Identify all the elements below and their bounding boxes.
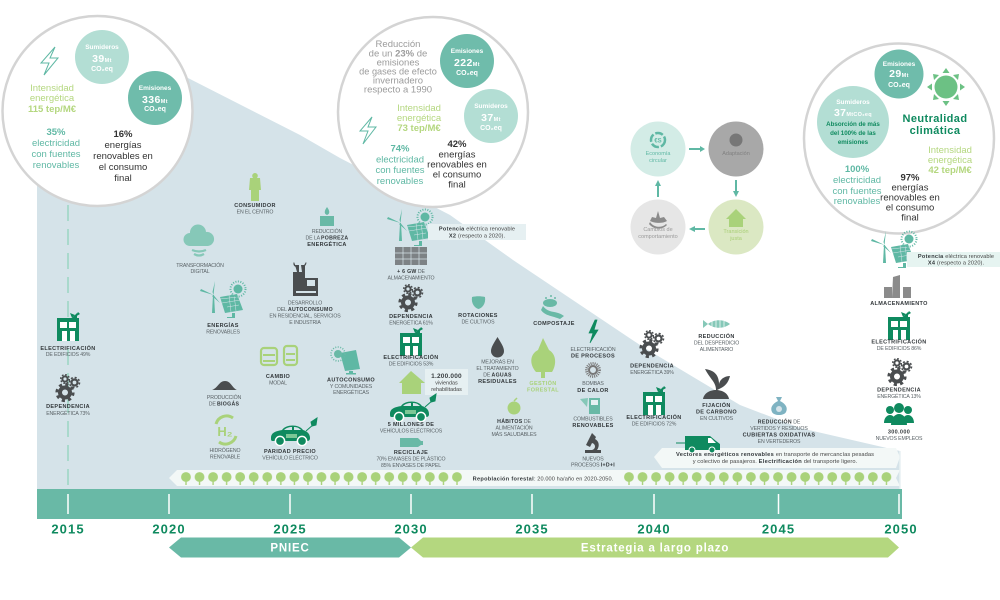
item: potencia x2 [387,209,526,246]
text: renovables: final [114,173,132,184]
bubble: sumideros: del 100% de las [830,130,876,137]
item: almacenamiento +6GW [388,247,435,282]
item: viviendas rehabilitadas: 1.200.000 [431,373,462,380]
text: renovables: final [901,212,919,224]
text: renovables: energías [439,150,476,160]
item: electrificación 53%: DE EDIFICIOS 53% [389,362,434,368]
bubble: sumideros: 37MtCO₂eq [834,107,872,119]
item: combustibles renovables: COMBUSTIBLES [573,416,613,422]
item: 5 millones vehículos [380,394,443,434]
item: nuevos empleos: NUEVOS EMPLEOS [876,436,923,442]
heading: neutralidad climática: Neutralidad [903,113,967,125]
text: intensidad [928,145,973,176]
vectors strip: Vectores energéticos renovables en transporte de mercancías pesadas [676,452,874,458]
year labels: 2020 [152,522,186,536]
circle: economía circular: Economía [646,151,671,157]
text: electricidad: electricidad [376,154,424,166]
item: energías renovables: ENERGÍAS [207,321,239,329]
item: autoconsumo y comunidades: AUTOCONSUMO [327,378,375,384]
item: fijación de carbono [696,369,737,422]
text: electricidad: renovables [377,176,423,187]
text: renovables: energías [105,140,142,151]
item: bombas de calor: DE CALOR [577,388,609,394]
item: autoconsumo: DESARROLLO [288,300,322,306]
bubble: emisiones: CO₂eq [888,82,910,89]
item: dependencia 2015 [46,375,90,417]
item: nuevos procesos [571,433,615,468]
item: reducción vertidos: CUBIERTAS OXIDATIVAS [743,432,815,438]
arrows between circles [655,146,739,232]
item: dependencia 13%: DEPENDENCIA [877,388,921,394]
circle: transición justa: justa [729,236,743,242]
item: mejoras aguas: EL TRATAMIENTO [476,366,519,372]
item: dependencia 13%: ENERGÉTICA 13% [877,393,921,400]
icon: lightning [360,117,376,144]
item: mejoras aguas [476,337,519,385]
bubble: sumideros: CO₂eq [480,125,502,132]
text: intensidad [28,83,77,115]
text: intensidad: energética [928,155,973,166]
circle: cambios de comportamiento: Cambios de [643,227,673,233]
cycle diagram [630,122,764,254]
item: hábitos de alimentación: ALIMENTACIÓN [495,424,533,432]
item: hábitos de alimentación: HÁBITOS DE [497,418,531,425]
text: electricidad: 74% [390,144,410,154]
item: reducción vertidos: REDUCCIÓN DE [758,418,801,426]
text: electricidad: con fuentes [832,186,882,197]
bubble: sumideros [817,86,889,158]
bubble: sumideros: emisiones [838,139,869,146]
item: nuevos empleos [876,403,923,442]
item: rotaciones de cultivos: ROTACIONES [458,313,498,319]
bubble: sumideros: 39Mt [92,53,112,65]
bubble: emisiones: 29Mt [889,68,909,80]
bubble: sumideros: Sumideros [836,99,870,106]
year labels: 2030 [394,522,428,536]
icon: lightning [41,47,58,75]
text: electricidad: con fuentes [31,149,81,160]
bubble: emisiones: Emisiones [451,48,484,55]
text: renovables [93,129,153,184]
item: dependencia 13% [877,359,921,400]
arrow: PNIEC: PNIEC [270,542,310,554]
item: potencia x4: X4 (respecto a 2020). [928,260,984,266]
item: hábitos de alimentación [491,398,537,438]
item: fijación de carbono: DE CARBONO [696,410,737,416]
item: energías renovables: RENOVABLES [206,330,240,336]
bubble: emisiones [874,50,924,98]
item: hidrógeno renovable: HIDRÓGENO [210,447,241,454]
item: reducción vertidos: EN VERTEDEROS [758,439,801,445]
item: mejoras aguas: MEJORAS EN [481,360,514,366]
text: renovables: energías [892,182,929,194]
item: paridad precio [262,418,318,462]
item: dependencia 2015: ENERGÉTICA 73% [46,410,90,417]
circle: economía circular: €S [654,138,662,144]
item: bombas de calor: BOMBAS [582,381,604,387]
item: transformación digital: DIGITAL [191,269,210,275]
item: almacenamiento +6GW: ALMACENAMIENTO [388,276,435,282]
text: electricidad: renovables [33,160,79,171]
text: intensidad: energética [30,93,75,104]
year labels: 2025 [273,522,307,536]
item: reducción desperdicio: ALIMENTARIO [700,347,733,353]
item: nuevos procesos: NUEVOS [582,456,604,462]
item: combustibles renovables: RENOVABLES [572,423,614,429]
text: renovables: el consumo [886,202,934,214]
item: nuevos empleos: 300.000 [888,430,910,436]
bubble: emisiones: 336Mt [142,94,168,106]
text: intensidad: Intensidad [30,83,74,94]
item: almacenamiento: ALMACENAMIENTO [870,301,928,307]
item: electrificación 72%: DE EDIFICIOS 72% [632,422,677,428]
item: viviendas rehabilitadas [399,369,468,395]
circle: economía circular [630,122,686,176]
item: electrificación 86%: ELECTRIFICACIÓN [871,338,927,346]
text: reducción: Reducción [376,39,420,50]
item: gestión forestal: GESTIÓN [529,379,557,387]
item: electrificación 72% [626,386,682,428]
icon: sun [927,68,965,106]
text: reducción: respecto a 1990 [364,84,432,96]
item: producción biogás [207,381,241,408]
item: reciclaje: RECICLAJE [394,450,428,456]
item: autoconsumo: DEL AUTOCONSUMO [277,307,333,313]
text: reducción: invernadero [373,76,423,86]
item: dependencia 2015: DEPENDENCIA [46,404,90,410]
text: intensidad: energética [397,113,442,124]
item: almacenamiento +6GW: + 6 GW DE [397,269,426,275]
text: electricidad: 35% [46,127,66,138]
bubble: emisiones: 222Mt [454,57,480,69]
text: renovables [880,172,940,224]
item: viviendas rehabilitadas: rehabilitadas [431,387,462,393]
circle 2015 [2,16,192,206]
item: mejoras aguas: RESIDUALES [478,379,517,385]
item: nuevos procesos: PROCESOS I+D+I [571,462,615,468]
item: cambio modal [261,346,297,386]
item: reducción desperdicio: DEL DESPERDICIO [694,340,739,346]
year labels: 2015 [51,522,85,536]
text: renovables: final [448,180,466,190]
item: 5 millones vehículos: 5 MILLONES DE [388,422,434,428]
timeline bar [37,489,902,519]
text: renovables: 97% [900,172,920,184]
circle: economía circular: circular [649,158,667,164]
item: autoconsumo [269,262,341,326]
item: reducción pobreza: REDUCCIÓN [312,228,343,235]
item: producción biogás: DE BIOGÁS [209,400,240,408]
item: paridad precio: PARIDAD PRECIO [264,449,316,455]
icon: van [676,436,720,453]
bubble: emisiones: CO₂eq [456,70,478,77]
item: reducción pobreza: ENERGÉTICA [307,240,347,248]
item: electrificación 53%: ELECTRIFICACIÓN [383,353,439,361]
item: autoconsumo y comunidades: Y COMUNIDADES [330,384,373,390]
item: fijación de carbono: EN CULTIVOS [700,416,734,422]
item: gestión forestal: FORESTAL [527,388,559,394]
text: intensidad: Intensidad [397,103,441,114]
text: electricidad: renovables [834,196,880,207]
circle: transición justa: Transición [723,229,749,235]
bubble: sumideros [75,30,129,84]
item: cambio modal: CAMBIO [266,374,291,380]
item: bombas de calor [577,364,609,394]
text: renovables: el consumo [99,162,147,173]
item: electrificación procesos [571,320,616,360]
text: electricidad: electricidad [833,175,881,186]
text: electricidad [31,127,81,171]
item: viviendas rehabilitadas: viviendas [435,380,458,386]
line 2050 [899,451,901,489]
year labels: 2040 [637,522,671,536]
item: hidrógeno renovable [210,416,241,460]
item: autoconsumo: EN RESIDENCIAL, SERVICIOS [269,314,341,320]
bubble: emisiones [440,34,494,88]
item: energías renovables [200,281,246,336]
item: potencia x2: Potencia eléctrica renovable [439,226,515,232]
background trajectory area [37,40,900,489]
item: fijación de carbono: FIJACIÓN [702,401,731,409]
text: renovables: 16% [113,129,133,140]
item: rotaciones de cultivos: DE CULTIVOS [462,320,495,326]
text: renovables: renovables en [93,151,153,162]
text: renovables: el consumo [433,170,481,180]
text: electricidad: con fuentes [375,165,425,176]
item: compostaje [533,295,575,327]
bubble: emisiones: Emisiones [139,85,172,92]
item: consumidor: CONSUMIDOR [234,203,276,209]
item: potencia x4: Potencia eléctrica renovable [918,254,994,260]
text: reducción: de gases de efecto [359,66,437,76]
circle: adaptación: Adaptación [722,151,750,157]
item: paridad precio: VEHÍCULO ELÉCTRICO [262,454,318,462]
item: reciclaje [377,438,446,469]
circle 2030 [338,17,528,207]
item: reducción vertidos: VERTIDOS Y RESIDUOS [750,426,808,432]
item: electrificación 2015: DE EDIFICIOS 49% [46,352,91,358]
text: intensidad: 42 tep/M€ [928,165,972,176]
bubble: emisiones: Emisiones [883,61,916,68]
item: reciclaje: 70% ENVASES DE PLÁSTICO [377,456,446,462]
text: intensidad: Intensidad [928,145,972,156]
circle: cambios de comportamiento [630,200,686,254]
item: electrificación procesos: ELECTRIFICACIÓN [571,346,616,353]
item: autoconsumo y comunidades [327,347,375,396]
item: electrificación procesos: DE PROCESOS [571,354,615,360]
item: reducción pobreza [306,207,348,248]
item: electrificación 86% [871,311,927,352]
item: reducción desperdicio: REDUCCIÓN [698,332,735,340]
text: reducción [359,39,437,96]
reforestation strip: Repoblación forestal: 20.000 ha/año en 2020-2050. [473,476,614,482]
text: intensidad [397,103,442,134]
item: dependencia 61%: ENERGÉTICA 61% [389,320,433,326]
bubble: emisiones [128,71,182,125]
item: compostaje: COMPOSTAJE [533,321,575,327]
text: reducción: emisiones [377,58,420,68]
item: transformación digital [176,224,224,275]
bubble: sumideros: CO₂eq [91,66,113,73]
item: almacenamiento [870,275,928,307]
text: renovables: 42% [447,139,467,150]
item: producción biogás: PRODUCCIÓN [207,394,241,401]
year labels: 2045 [762,522,795,536]
item: hidrógeno renovable: RENOVABLE [210,454,241,460]
item: autoconsumo y comunidades: ENERGÉTICAS [333,389,370,396]
item: combustibles renovables [572,398,614,429]
item: electrificación 53% [383,327,439,368]
year labels [51,522,918,536]
bubble: emisiones: CO₂eq [144,106,166,113]
item: cambio modal: MODAL [269,380,287,386]
item: reducción desperdicio [694,320,739,353]
item: dependencia 61% [389,285,433,326]
item: hidrógeno renovable: H₂ [217,424,233,439]
item: electrificación 86%: DE EDIFICIOS 86% [877,346,922,352]
item: reciclaje: 85% ENVASES DE PAPEL [381,463,441,469]
year labels: 2035 [515,522,549,536]
heading: neutralidad climática [903,113,967,137]
text: electricidad [832,164,882,207]
text: electricidad: 100% [845,164,870,175]
item: consumidor: EN EL CENTRO [237,210,273,216]
reforestation strip [169,470,900,486]
text: renovables: renovables en [427,160,487,170]
item: reducción pobreza: DE LA POBREZA [306,236,348,242]
text: renovables [427,139,487,190]
arrow: Estrategia a largo plazo: Estrategia a largo plazo [581,542,729,554]
item: electrificación 2015: ELECTRIFICACIÓN [40,344,96,352]
text: renovables: renovables en [880,192,940,204]
item: dependencia 39% [630,331,674,376]
item: potencia x2: X2 (respecto a 2020). [449,234,505,240]
item: electrificación 2015 [40,312,96,358]
circle: transición justa [708,200,764,254]
bubble: sumideros: Sumideros [474,103,508,110]
arrow: PNIEC [169,538,411,558]
item: gestión forestal [527,338,559,394]
item: reducción vertidos [743,397,815,445]
year labels: 2050 [884,522,918,536]
circle 2050 [804,44,994,234]
item: potencia x4 [871,231,1000,268]
arrow: Estrategia a largo plazo [411,538,899,558]
item: consumidor [234,173,276,216]
item: 5 millones vehículos: VEHÍCULOS ELÉCTRICOS [380,428,443,434]
bubble: sumideros [464,89,518,143]
item: mejoras aguas: DE AGUAS [483,372,512,378]
dashed line 2015 [67,205,69,489]
circle: cambios de comportamiento: comportamiento [638,234,678,240]
text: intensidad: 73 tep/M€ [397,123,441,134]
text: reducción: de un 23% de [369,48,427,60]
vectors strip: y colectivo de pasajeros. Electrificación del transporte ligero. [693,459,858,465]
heading: neutralidad climática: climática [910,125,961,137]
bubble: sumideros: 37Mt [481,112,501,124]
text: electricidad: electricidad [32,138,80,149]
item: autoconsumo: E INDUSTRIA [289,320,321,326]
item: electrificación 72%: ELECTRIFICACIÓN [626,413,682,421]
item: transformación digital: TRANSFORMACIÓN [176,262,224,269]
item: rotaciones de cultivos [458,296,498,326]
item: dependencia 61%: DEPENDENCIA [389,314,433,320]
item: dependencia 39%: DEPENDENCIA [630,364,674,370]
text: intensidad: 115 tep/M€ [28,104,77,115]
bubble: sumideros: Absorción de más [826,121,880,128]
bubble: sumideros: Sumideros [85,44,119,51]
item: hábitos de alimentación: MÁS SALUDABLES [491,431,537,438]
item: dependencia 39%: ENERGÉTICA 39% [630,369,674,376]
text: electricidad [375,144,425,187]
vectors strip [654,448,900,468]
